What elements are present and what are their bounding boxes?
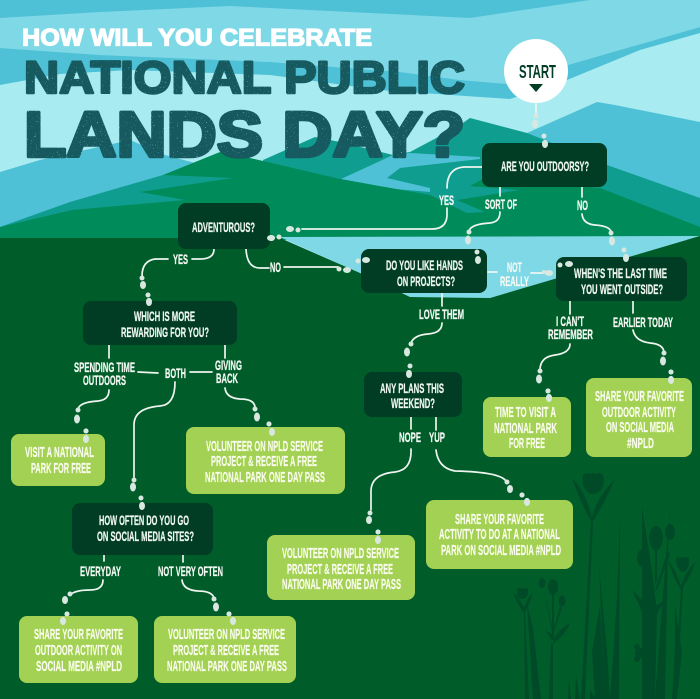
question: more rewarding: WHICH IS MORE — [134, 308, 195, 324]
branch labels: NO — [577, 197, 588, 213]
result: visit a national park — [11, 428, 105, 486]
result: share outdoor activity — [19, 612, 138, 683]
arrow: earlier today — [633, 301, 674, 384]
question: social media — [72, 502, 213, 555]
footprints into adventurous — [267, 234, 282, 241]
arrow: nope — [366, 417, 411, 544]
arrow: start to outdoorsy — [532, 103, 548, 148]
question: last time outside — [556, 254, 687, 301]
branch labels: BACK — [216, 370, 238, 386]
branch labels: NOT — [507, 259, 522, 275]
question: social media: ON SOCIAL MEDIA SITES? — [97, 528, 194, 544]
question: adventurous — [178, 203, 275, 249]
question: weekend plans — [364, 370, 462, 417]
result: volunteer giving back: PROJECT & RECEIVE A FREE — [211, 454, 317, 470]
question: social media: HOW OFTEN DO YOU GO — [99, 512, 189, 528]
start marker: START — [519, 62, 556, 82]
result: share activity at a park: ACTIVITY TO DO AT A NATIONAL — [439, 527, 560, 543]
question: hands on projects: ON PROJECTS? — [397, 273, 455, 289]
arrow: adventurous no — [246, 249, 370, 273]
branch labels: SORT OF — [485, 196, 517, 212]
branch labels: YES — [439, 192, 454, 208]
question: weekend plans: WEEKEND? — [391, 395, 435, 411]
branch labels: EVERYDAY — [80, 563, 121, 579]
result: time to visit — [483, 388, 571, 457]
result: visit a national park: PARK FOR FREE — [31, 461, 91, 477]
question: hands on projects — [361, 249, 487, 293]
result: share activity at a park: SHARE YOUR FAVORITE — [455, 512, 544, 528]
branch labels: GIVING — [215, 357, 242, 373]
branch labels: YUP — [429, 429, 445, 445]
arrow: spending time outdoors — [74, 345, 109, 443]
result: share outdoor activity: SHARE YOUR FAVORITE — [34, 627, 123, 643]
result: volunteer not very often — [154, 612, 296, 683]
branch labels: OUTDOORS — [83, 372, 126, 388]
result: share favorite right: #NPLD — [627, 436, 654, 452]
question: weekend plans: ANY PLANS THIS — [380, 380, 444, 396]
connector lines to both — [138, 372, 212, 373]
arrow: both — [130, 382, 175, 510]
arrow: i can't remember — [536, 301, 570, 402]
question: more rewarding: REWARDING FOR YOU? — [121, 324, 209, 340]
branch labels: NO — [270, 259, 281, 275]
result: volunteer giving back — [186, 422, 345, 494]
question: are you outdoorsy: ARE YOU OUTDOORSY? — [501, 158, 589, 174]
result: volunteer giving back: NATIONAL PARK ONE DAY PASS — [205, 470, 325, 486]
plants silhouette — [513, 473, 696, 699]
branch labels: REALLY — [500, 273, 529, 289]
branch labels: BOTH — [165, 365, 186, 381]
arrow: everyday — [60, 555, 104, 625]
branch labels: YES — [173, 251, 188, 267]
start marker — [504, 39, 568, 103]
branch labels: LOVE THEM — [419, 306, 464, 322]
question: adventurous: ADVENTUROUS? — [192, 219, 255, 235]
title line one: NATIONAL PUBLIC — [24, 52, 465, 103]
branch labels: NOT VERY OFTEN — [158, 563, 223, 579]
result: time to visit: NATIONAL PARK — [494, 421, 557, 437]
arrow: yup — [436, 417, 530, 506]
title line two: LANDS DAY? — [24, 98, 465, 170]
branch labels: REMEMBER — [548, 326, 593, 342]
subtitle line: HOW WILL YOU CELEBRATE — [22, 24, 372, 52]
arrow: not really — [488, 261, 573, 276]
result: volunteer not very often: NATIONAL PARK ONE DAY PASS — [167, 659, 287, 675]
branch labels: NOPE — [399, 429, 421, 445]
arrow: yes to adventurous — [286, 167, 482, 232]
question: hands on projects: DO YOU LIKE HANDS — [386, 257, 463, 273]
result: share activity at a park — [426, 492, 573, 569]
arrow: giving back — [225, 345, 275, 436]
arrow: love them — [404, 293, 442, 378]
result: volunteer not very often: PROJECT & RECEIVE A FREE — [173, 643, 279, 659]
title — [22, 24, 465, 170]
result: volunteer nope — [267, 530, 415, 600]
result: volunteer nope: NATIONAL PARK ONE DAY PASS — [282, 577, 401, 593]
result: visit a national park: VISIT A NATIONAL — [25, 445, 94, 461]
result: volunteer giving back: VOLUNTEER ON NPLD SERVICE — [206, 439, 323, 455]
arrow: not very often — [182, 555, 236, 625]
question: more rewarding — [83, 298, 237, 345]
result: volunteer nope: PROJECT & RECEIVE A FREE — [287, 562, 393, 578]
branch labels: I CAN'T — [556, 313, 584, 329]
result: time to visit: TIME TO VISIT A — [495, 405, 556, 421]
question: are you outdoorsy — [482, 140, 607, 187]
result: volunteer not very often: VOLUNTEER ON NPLD SERVICE — [168, 627, 285, 643]
result: share activity at a park: PARK ON SOCIAL MEDIA #NPLD — [441, 543, 561, 559]
arrow: no to last time outside — [582, 187, 629, 262]
branch labels: SPENDING TIME — [74, 359, 135, 375]
branch labels — [74, 192, 673, 579]
result: share favorite right — [586, 370, 692, 457]
result: time to visit: FOR FREE — [509, 436, 545, 452]
result: share outdoor activity: SOCIAL MEDIA #NPLD — [36, 659, 122, 675]
arrow: sort of to hands on — [465, 187, 500, 264]
result: volunteer nope: VOLUNTEER ON NPLD SERVICE — [282, 546, 399, 562]
result: share outdoor activity: OUTDOOR ACTIVITY ON — [35, 643, 122, 659]
arrow: adventurous yes — [140, 249, 214, 306]
